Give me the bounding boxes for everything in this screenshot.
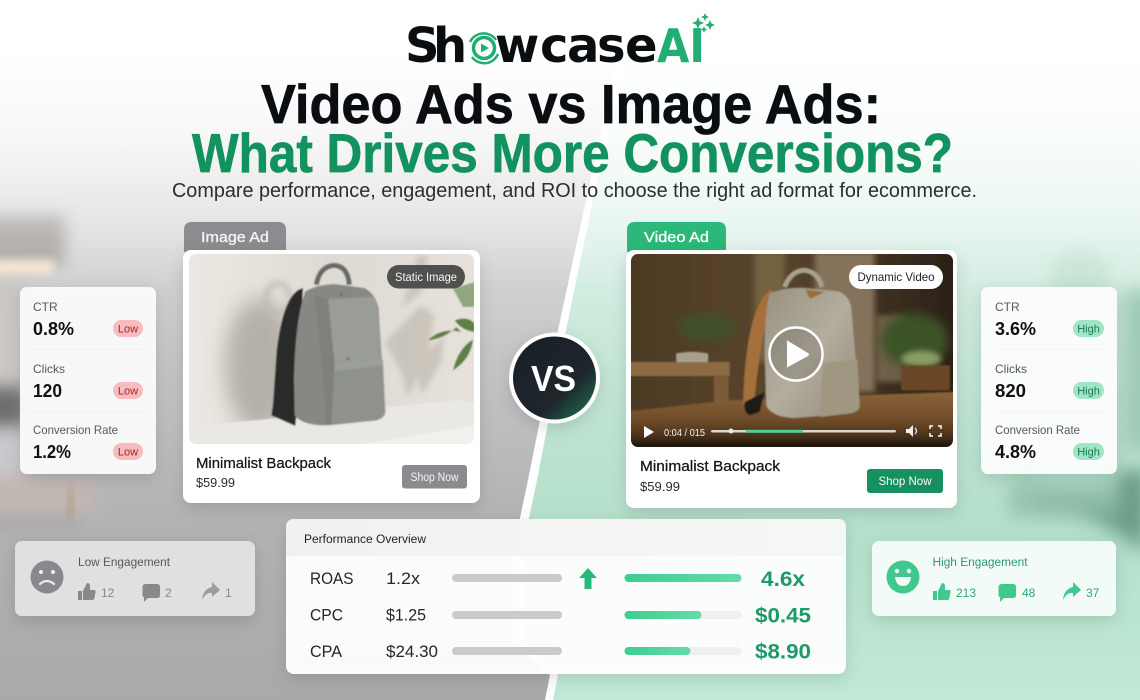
stat: likes: 12	[101, 586, 115, 600]
subtitle: Compare performance, engagement, and ROI to choose the right ad format for ecommerce.	[172, 179, 977, 202]
metric: Clicks: 120	[33, 381, 62, 401]
metric: CTR	[33, 300, 143, 339]
badge: Dynamic Video: Dynamic Video	[858, 270, 935, 284]
panel: image ad metrics	[20, 287, 156, 474]
icon: sparkles	[692, 13, 715, 33]
metric: Clicks: Clicks	[33, 362, 65, 376]
stat: shares	[1063, 582, 1100, 600]
badge: Dynamic Video	[849, 265, 943, 289]
video controls: 0:04 / 015	[664, 428, 705, 439]
row: CPA	[310, 640, 811, 664]
metric: Conversion Rate: High	[1077, 446, 1100, 458]
metric: Conversion Rate	[33, 423, 143, 462]
metric: Clicks: High	[1077, 386, 1100, 398]
panel: video ad metrics	[981, 287, 1117, 474]
tab: Video Ad	[627, 222, 726, 252]
price: $59.99	[640, 479, 680, 494]
icon: up arrow	[579, 568, 597, 589]
panel: performance overview	[286, 519, 846, 674]
stat: likes	[78, 583, 115, 600]
metric: Clicks: Low	[118, 386, 138, 398]
metric: Conversion Rate: Conversion Rate	[33, 423, 118, 437]
metric: CTR: CTR	[995, 300, 1020, 314]
title: Video Ads vs Image Ads:	[261, 73, 881, 135]
stat: shares: 1	[225, 586, 232, 600]
metric: Clicks: 820	[995, 381, 1026, 401]
row: CPC	[310, 604, 811, 628]
stat: likes	[933, 583, 976, 600]
button: Shop Now	[867, 469, 943, 493]
metric: Conversion Rate: Conversion Rate	[995, 423, 1080, 437]
image: static backpack photo	[188, 252, 478, 449]
tab: Video Ad: Video Ad	[644, 229, 709, 246]
stat: comments	[998, 584, 1036, 602]
metric: CTR: CTR	[33, 300, 58, 314]
metric: Clicks: Clicks	[995, 362, 1027, 376]
row: ROAS: 1.2x	[386, 569, 421, 588]
stat: comments	[142, 584, 172, 602]
product name: Minimalist Backpack	[640, 459, 781, 475]
metric: Conversion Rate: 1.2%	[33, 442, 71, 462]
panel: image ad card	[183, 250, 480, 503]
metric: Conversion Rate: Low	[118, 446, 138, 458]
stat: shares	[202, 582, 232, 600]
row: ROAS	[310, 568, 805, 591]
button: Shop Now: Shop Now	[410, 472, 459, 484]
stat: likes: 213	[956, 586, 976, 600]
stat: shares: 37	[1086, 586, 1100, 600]
video controls	[644, 425, 941, 439]
row: CPA: $24.30	[386, 642, 438, 661]
VS badge: VS	[531, 358, 576, 399]
tab: Image Ad	[184, 222, 286, 252]
button: Shop Now: Shop Now	[878, 474, 932, 488]
metric: Clicks	[33, 362, 143, 401]
row: CPC: CPC	[310, 606, 343, 624]
stat: comments: 2	[165, 586, 172, 600]
icon: sad face	[30, 560, 64, 594]
price: $59.99	[196, 475, 235, 490]
row: CPC: $1.25	[386, 606, 426, 624]
icon: play ring in logo	[470, 33, 498, 63]
badge: Static Image	[387, 265, 465, 288]
metric: CTR: 0.8%	[33, 319, 74, 339]
image: video frame with backpack	[628, 252, 956, 449]
metric: CTR: High	[1077, 324, 1100, 336]
panel: low engagement	[15, 541, 255, 616]
VS badge	[509, 332, 600, 424]
row: CPC: $0.45	[755, 604, 811, 628]
metric: CTR: 3.6%	[995, 319, 1036, 339]
label: High Engagement	[932, 557, 1028, 569]
metric: Clicks	[995, 362, 1104, 401]
metric: Conversion Rate: 4.8%	[995, 442, 1036, 462]
row: ROAS: 4.6x	[761, 568, 805, 591]
label: Low Engagement	[78, 557, 171, 569]
metric: CTR	[995, 300, 1104, 339]
panel: high engagement	[872, 541, 1116, 616]
logo: ShowcaseAI: Showcase	[405, 18, 658, 74]
metric: CTR: Low	[118, 324, 138, 336]
stat: comments: 48	[1022, 586, 1036, 600]
icon: happy face	[886, 560, 920, 594]
title	[192, 73, 953, 184]
row: ROAS: ROAS	[310, 569, 354, 588]
header: Performance Overview	[304, 534, 427, 546]
icon: center play button	[770, 328, 822, 380]
logo: ShowcaseAI: AI	[657, 19, 705, 73]
button: Shop Now	[402, 465, 467, 488]
row: CPA: CPA	[310, 642, 343, 661]
badge: Static Image: Static Image	[395, 272, 457, 284]
metric: Conversion Rate	[995, 423, 1104, 462]
row: CPA: $8.90	[755, 640, 811, 664]
panel: video ad card	[626, 250, 957, 508]
header	[286, 519, 846, 556]
product name: Minimalist Backpack	[196, 456, 332, 472]
title: What Drives More Conversions?	[192, 122, 953, 184]
tab: Image Ad: Image Ad	[201, 229, 269, 246]
